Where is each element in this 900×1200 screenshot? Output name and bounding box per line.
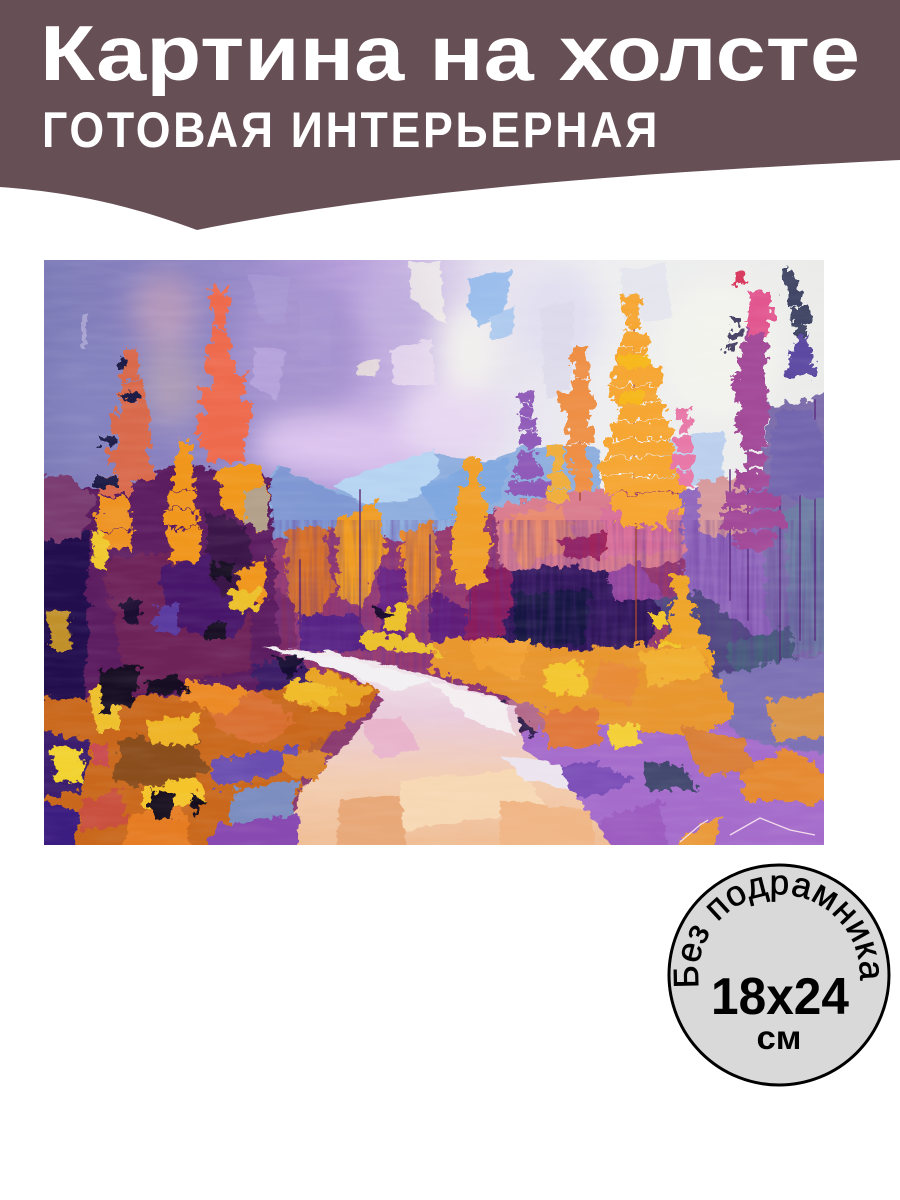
sky bbox=[44, 260, 824, 492]
tree: orange centre bbox=[450, 460, 490, 576]
road bbox=[262, 646, 611, 845]
title: Картина на холсте bbox=[40, 9, 860, 97]
painting: autumn forest landscape bbox=[44, 260, 824, 845]
tree: magenta bbox=[720, 335, 785, 540]
left foreground foliage bbox=[44, 658, 380, 845]
tree: yellow orange bbox=[546, 445, 568, 496]
tree: orange pink bbox=[560, 348, 594, 484]
trees: right side bbox=[450, 272, 826, 674]
tree: dark top bbox=[784, 272, 812, 328]
tree trunks bbox=[299, 329, 816, 664]
brush stroke texture bbox=[44, 260, 824, 845]
distant forest band bbox=[258, 385, 860, 700]
dark and yellow paint daubs bbox=[48, 525, 445, 820]
tree: yellow right bbox=[660, 573, 715, 670]
badge: canvas size bbox=[668, 864, 890, 1086]
subtitle: ГОТОВАЯ ИНТЕРЬЕРНАЯ bbox=[42, 102, 660, 158]
badge size: 18x24 bbox=[711, 968, 849, 1026]
tree: tall orange bbox=[600, 295, 686, 518]
tree: tall coral bbox=[196, 288, 250, 452]
tree: pink bbox=[672, 408, 694, 478]
lower base layers bbox=[290, 697, 546, 816]
tree: dark and coral left bbox=[95, 358, 154, 540]
tree: lower orange foliage left bbox=[164, 448, 270, 605]
badge unit: см bbox=[756, 1019, 802, 1056]
signature bbox=[680, 818, 815, 842]
trees: left side bbox=[44, 464, 282, 702]
mountains bbox=[268, 430, 726, 542]
header banner bbox=[0, 0, 900, 230]
tree: purple bbox=[508, 392, 548, 488]
right foreground ground bbox=[426, 636, 824, 845]
badge curved label: Без подрамника bbox=[674, 875, 879, 986]
vertical paint texture over forest bbox=[262, 520, 824, 700]
